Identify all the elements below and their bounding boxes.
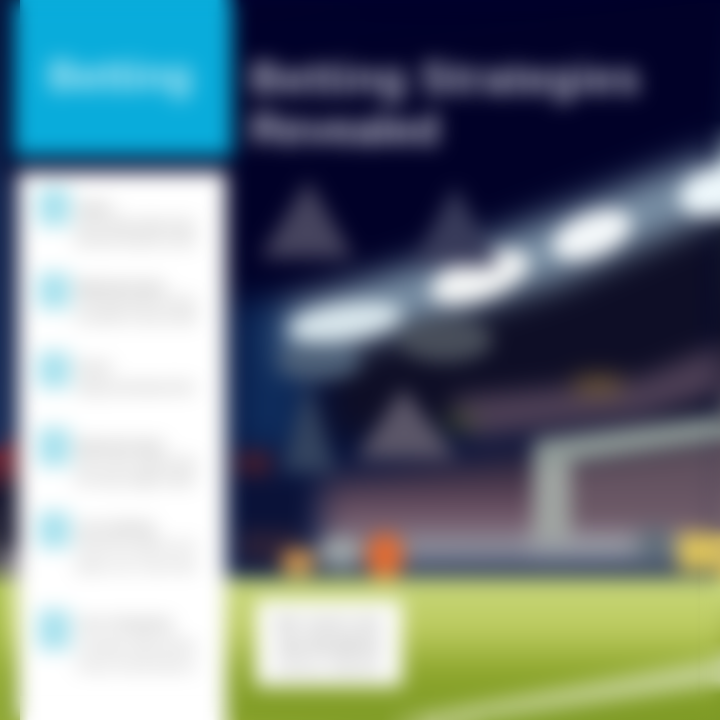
strategy 1	[38, 188, 196, 248]
strategy 6: many bookmakers	[76, 657, 196, 673]
players and advertising blocks	[280, 533, 720, 579]
strategy 5: plays out, react fast	[76, 557, 196, 573]
icon: tower lower	[356, 388, 457, 458]
strategy 3: Form	[76, 359, 111, 375]
strategy 1: the true chance of win	[76, 232, 196, 248]
header label: Betting	[48, 52, 193, 99]
strategy 2: in profit on any result	[76, 309, 196, 325]
strategy 5: Live betting	[76, 519, 155, 535]
title: Revealed	[250, 105, 440, 154]
floodlight tower icons	[260, 180, 499, 472]
icon: tower left	[260, 180, 354, 258]
pitch	[0, 578, 720, 720]
strategy 6: Line shopping	[76, 615, 172, 631]
title	[250, 54, 640, 154]
callout: every match	[276, 659, 380, 676]
icon: tower centre	[411, 186, 499, 266]
strategy 1: Value	[76, 199, 113, 215]
strategy 6	[38, 610, 196, 673]
strategy 4: Bankroll plan	[76, 437, 165, 453]
strategy 4: Set a firm stake limit	[76, 454, 196, 470]
strategy 6: Compare odds across	[76, 637, 196, 653]
panel: strategy list	[18, 172, 226, 720]
strategy 4	[38, 428, 196, 487]
title: Betting Strategies	[250, 54, 640, 103]
floodlight band	[278, 150, 720, 380]
goal frame	[533, 416, 720, 540]
strategy 2	[38, 273, 197, 325]
strategy 4: for every single match	[76, 471, 196, 487]
strategy 2: Use free bets to lock	[76, 293, 197, 309]
strategy 5	[38, 512, 196, 573]
strategy 1: Find odds better than	[76, 216, 196, 232]
strategy 3	[38, 352, 196, 395]
strategy 2: Matched bets	[76, 278, 166, 294]
crowd stands	[0, 345, 720, 585]
strategy 5: Read the game as it	[76, 537, 196, 553]
callout	[256, 600, 402, 686]
icon: tower far left	[282, 380, 336, 472]
header panel	[14, 0, 232, 156]
callout: stay disciplined	[276, 637, 380, 654]
strategy 3: Study recent team form	[76, 379, 196, 395]
callout: Bet smart and	[276, 615, 380, 632]
